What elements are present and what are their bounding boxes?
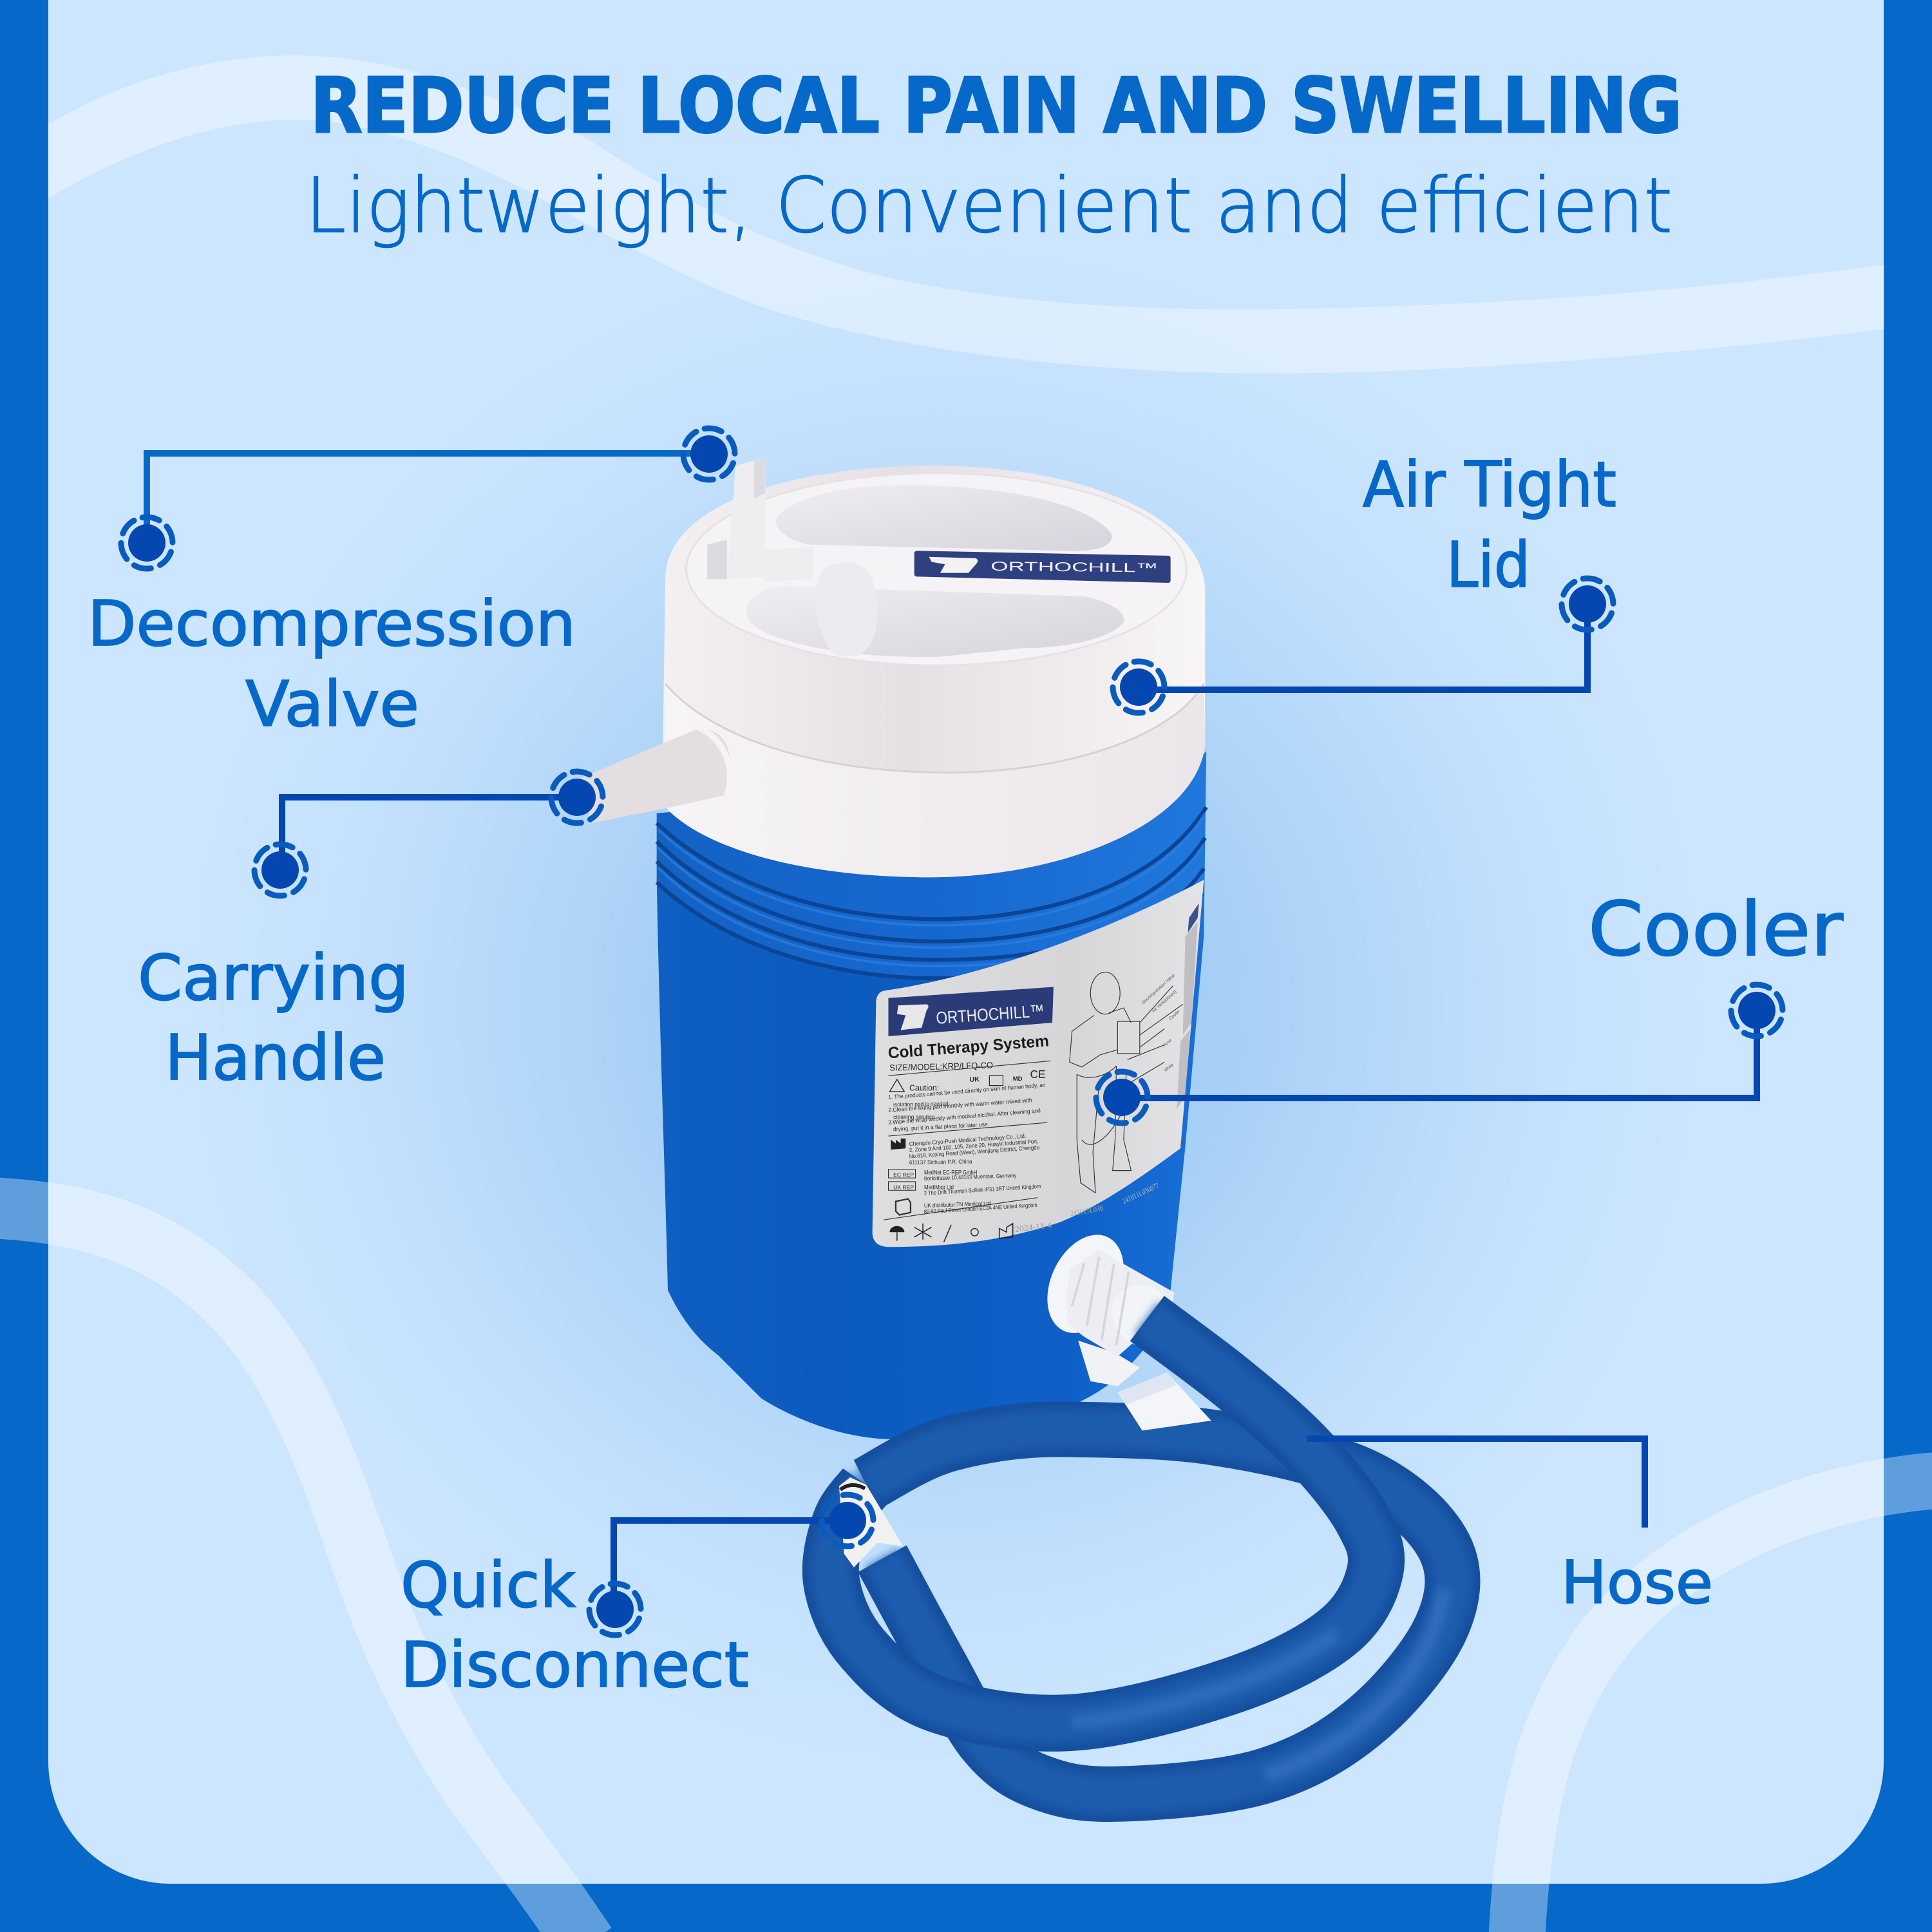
hose fitting nut	[1032, 1222, 1188, 1360]
sticker figure captions: Decompression Valve	[1141, 973, 1176, 1005]
product: cold therapy cooler with hose	[579, 457, 1453, 1794]
sticker line drawing of a man	[1070, 972, 1183, 1193]
sticker instructions: 2.Clean the fixing pad monthly with warm water mixed with	[888, 1097, 1032, 1113]
marker: cooler body	[1092, 1068, 1151, 1127]
callout: quick disconnect	[585, 1491, 877, 1639]
sticker instructions: drying, put it in a flat place for later use.	[893, 1121, 989, 1132]
lid lower recess	[746, 586, 1124, 657]
label: air tight lid: Lid	[1446, 529, 1530, 601]
sticker addresses: MedNet EC-REP GmbH	[924, 1169, 977, 1175]
sticker figure captions: Air Vent(closed)	[1151, 990, 1177, 1014]
sticker symbols and batch numbers: 241011L036	[1070, 1204, 1104, 1218]
lid top face	[687, 473, 1187, 665]
sticker symbols and batch numbers: 241011L036077	[1121, 1182, 1160, 1206]
hose fitting cap	[1078, 1341, 1211, 1430]
sticker addresses: MediMap Ltd	[924, 1184, 954, 1190]
callout: hose	[1307, 1439, 1645, 1528]
marker: valve top	[679, 424, 739, 484]
sticker caution: UK	[969, 1075, 980, 1084]
sticker addresses	[888, 1133, 1041, 1215]
sticker addresses: Chengdu Cryo-Push Medical Technology Co., Ltd.	[909, 1133, 1026, 1147]
lid plug	[816, 562, 878, 656]
sticker instructions: cleaning solution.	[893, 1113, 936, 1120]
sticker instructions	[888, 1081, 1046, 1132]
sticker addresses: 86-90 Paul Street London EC2A 4NE United Kingdom	[923, 1202, 1037, 1215]
callout: air tight lid	[1109, 574, 1617, 717]
marker: connector label	[585, 1580, 645, 1639]
cooler rib bands	[657, 752, 1206, 980]
hose back loop	[866, 1429, 1453, 1794]
sticker instructions: isolation pad is needed.	[893, 1101, 950, 1108]
product sticker: ORTHOCHILL™	[935, 1001, 1045, 1028]
sticker side text column	[1177, 903, 1199, 1109]
sticker figure captions: Wrap	[1164, 1063, 1175, 1073]
sticker figure captions: Hose	[1162, 1038, 1173, 1048]
cooler body	[657, 752, 1206, 1439]
lid upper recess	[776, 485, 1112, 551]
title: REDUCE LOCAL PAIN AND SWELLING	[310, 61, 1682, 150]
label: quick disconnect: Quick	[401, 1549, 576, 1622]
hose front loop	[831, 1318, 1376, 1723]
sticker instructions: 1. The products cannot be used directly on skin of human body, an	[888, 1081, 1046, 1101]
label: decompression valve: Valve	[245, 668, 419, 741]
lid lower band	[665, 684, 1205, 877]
sticker figure captions	[1141, 973, 1182, 1073]
sticker caution	[889, 1068, 1045, 1092]
callout: cooler	[1092, 981, 1786, 1127]
sticker symbols and batch numbers	[889, 1182, 1160, 1242]
sticker addresses: 2, Zone 9 And 102, 105, Zone 20, Huayin Industrial Port,	[909, 1138, 1039, 1153]
sticker caution: CE	[1030, 1068, 1045, 1081]
sticker caution: MD	[1013, 1075, 1023, 1083]
label: carrying handle: Carrying	[138, 942, 409, 1014]
brand plate on lid: ORTHOCHILL™	[990, 560, 1159, 576]
carrying handle spout	[579, 727, 732, 823]
label: air tight lid	[1363, 448, 1616, 601]
sticker logo	[897, 1004, 929, 1030]
label: hose: Hose	[1561, 1548, 1713, 1617]
sticker header	[888, 987, 1054, 1036]
cooler rib grooves	[657, 807, 1206, 978]
marker: handle label	[251, 840, 310, 900]
sticker rules	[884, 1061, 1051, 1220]
brand plate on lid	[914, 551, 1171, 583]
sticker figure captions: Cooler	[1168, 1009, 1182, 1021]
sticker product name: Cold Therapy System	[887, 1032, 1050, 1063]
sticker addresses: Borkstrasse 10,48163 Muenster, Germany	[924, 1172, 1017, 1182]
sticker addresses: 2 The Drift Thurston Suffolk IP31 3RT United Kingdom	[923, 1183, 1041, 1197]
label: quick disconnect: Disconnect	[401, 1629, 749, 1701]
sticker addresses: 611137 Sichuan P.R. China	[909, 1158, 972, 1166]
subtitle: Lightweight, Convenient and efficient	[305, 161, 1672, 250]
sticker caution: Caution:	[909, 1083, 939, 1092]
sticker symbols and batch numbers: 2024-11-4	[1014, 1220, 1052, 1234]
decompression valve stem	[707, 457, 813, 582]
callout: carrying handle	[251, 768, 607, 900]
product sticker	[873, 880, 1204, 1247]
sticker addresses: EC REP	[893, 1171, 914, 1178]
quick disconnect connector	[839, 1477, 903, 1567]
marker: lid	[1109, 658, 1168, 717]
white lid	[663, 466, 1205, 877]
marker: connector	[818, 1491, 877, 1550]
label: decompression valve: Decompression	[88, 587, 576, 660]
sticker addresses: UK distributor:TN Medical Ltd	[924, 1200, 990, 1209]
sticker addresses: No.618, Kexing Road (West), Wenjiang District, Chengdu	[909, 1144, 1040, 1159]
product sticker: SIZE/MODEL:KRP/LFQ-CO	[889, 1060, 993, 1073]
marker: lid label	[1558, 574, 1617, 634]
label: carrying handle	[138, 942, 409, 1094]
marker: valve label	[117, 513, 176, 573]
lid seam	[665, 684, 1204, 773]
label: cooler: Cooler	[1588, 886, 1843, 973]
marker: cooler label	[1727, 981, 1786, 1040]
sticker instructions: 3.Wipe the wrap weekly with medical alcohol. After cleaning and	[888, 1107, 1041, 1126]
label: quick disconnect	[401, 1549, 749, 1701]
marker: handle tip	[547, 768, 607, 827]
sticker addresses: UK REP	[893, 1184, 914, 1190]
label: decompression valve	[88, 587, 576, 741]
label: air tight lid: Air Tight	[1363, 448, 1616, 521]
label: carrying handle: Handle	[165, 1021, 386, 1094]
callout: decompression valve	[117, 424, 739, 573]
